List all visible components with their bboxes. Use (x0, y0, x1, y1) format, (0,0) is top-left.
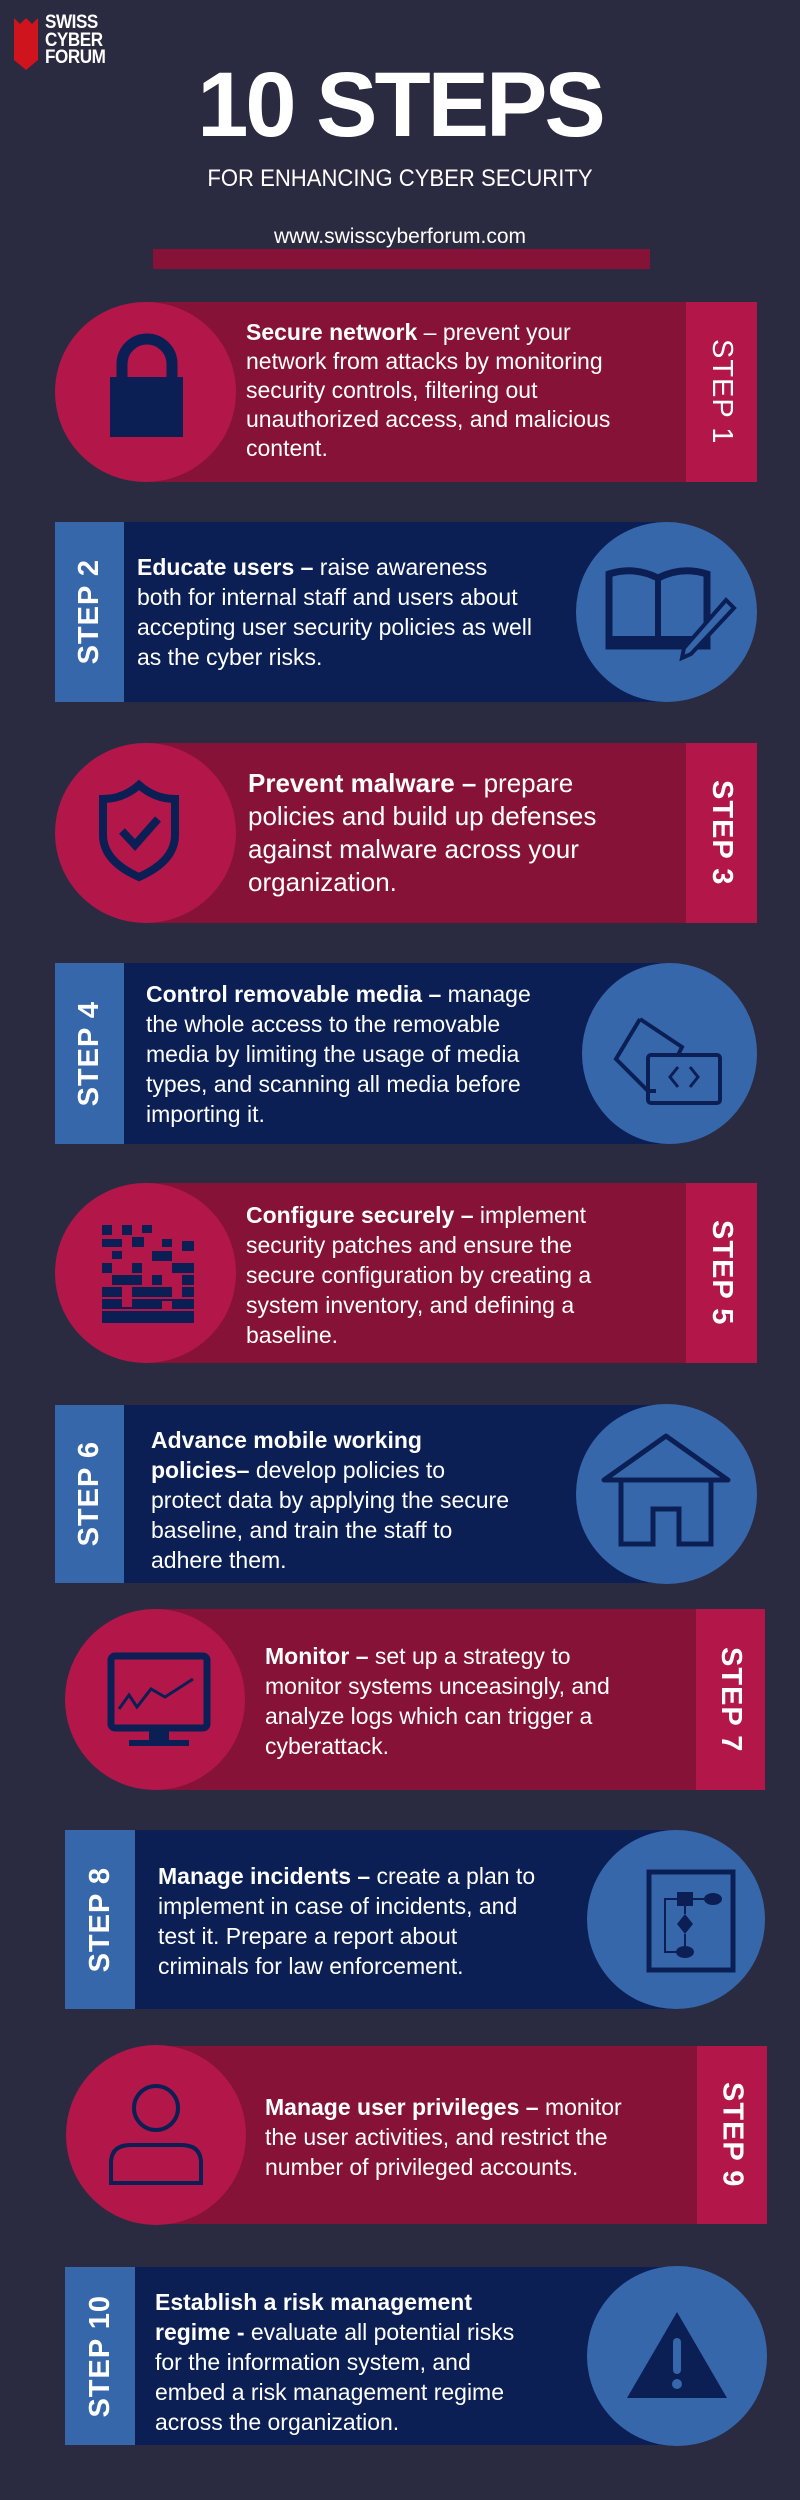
text: secure network: security controls, filtering out (246, 377, 537, 403)
text: establish a risk management regime: for the information system, and (155, 2349, 471, 2375)
icon: shield with check (55, 743, 236, 923)
logo text (45, 12, 105, 68)
icon: removable media cards (582, 963, 757, 1144)
text: manage incidents: Manage incidents – create a plan to (158, 1863, 535, 1889)
text: secure network: network from attacks by monitoring (246, 348, 603, 374)
step 1 tab: STEP 1 (706, 339, 738, 445)
text: advance mobile working policies (151, 1427, 509, 1573)
text: prevent malware (248, 768, 596, 897)
logo (14, 12, 105, 70)
panel: step 1 (55, 302, 757, 482)
text: establish a risk management regime: regime - evaluate all potential risks (155, 2319, 514, 2345)
icon: flowchart (587, 1830, 765, 2009)
text: control removable media: types, and scanning all media before (146, 1071, 521, 1097)
step 8 tab (65, 1830, 135, 2009)
text: manage user privileges: Manage user privileges – monitor (265, 2094, 622, 2120)
step 8 tab: STEP 8 (84, 1867, 116, 1972)
text: configure securely: system inventory, and defining a (246, 1292, 574, 1318)
text: secure network: unauthorized access, and malicious (246, 406, 610, 432)
step 2 tab (55, 522, 124, 702)
text: configure securely: Configure securely – implement (246, 1202, 586, 1228)
logo text: SWISS (45, 12, 98, 33)
text: manage incidents: criminals for law enforcement. (158, 1953, 464, 1979)
panel: step 8 (65, 1830, 765, 2009)
panel: step 3 (55, 743, 757, 923)
step 5 tab: STEP 5 (706, 1220, 738, 1326)
text: control removable media (146, 981, 531, 1127)
text: secure network: Secure network – prevent your (246, 319, 571, 345)
text: educate users: Educate users – raise awareness (137, 554, 487, 580)
text: establish a risk management regime: Establish a risk management (155, 2289, 472, 2315)
text: manage incidents: test it. Prepare a report about (158, 1923, 457, 1949)
red divider bar (153, 249, 650, 269)
text: control removable media: media by limiting the usage of media (146, 1041, 519, 1067)
step 3 tab (686, 743, 757, 923)
step 9 tab: STEP 9 (716, 2082, 748, 2188)
panel: step 6 (55, 1404, 757, 1584)
step 2 tab: STEP 2 (73, 559, 105, 665)
subtitle: FOR ENHANCING CYBER SECURITY (207, 165, 593, 192)
step 4 tab: STEP 4 (73, 1001, 105, 1106)
icon: red shield (14, 18, 38, 70)
text: control removable media: Control removable media – manage (146, 981, 531, 1007)
text: secure network: content. (246, 435, 328, 461)
title: 10 STEPS (197, 54, 603, 156)
text: manage user privileges: number of privileged accounts. (265, 2154, 578, 2180)
step 6 tab: STEP 6 (73, 1441, 105, 1547)
text: prevent malware: against malware across your (248, 834, 579, 864)
step 4 tab (55, 963, 124, 1144)
icon: book and pencil (576, 522, 757, 702)
step 9 tab (697, 2046, 767, 2224)
step 6 tab (55, 1405, 124, 1583)
text: educate users (137, 554, 532, 670)
text: manage incidents: implement in case of incidents, and (158, 1893, 517, 1919)
text: manage user privileges: the user activities, and restrict the (265, 2124, 608, 2150)
icon: monitor with chart (65, 1609, 245, 1790)
text: control removable media: importing it. (146, 1101, 265, 1127)
text: monitor: cyberattack. (265, 1733, 389, 1759)
text: monitor: Monitor – set up a strategy to (265, 1643, 571, 1669)
text: advance mobile working policies: baseline, and train the staff to (151, 1517, 452, 1543)
text: establish a risk management regime (155, 2289, 514, 2435)
text: control removable media: the whole access to the removable (146, 1011, 500, 1037)
step 3 tab: STEP 3 (706, 780, 738, 886)
icon: padlock (55, 302, 236, 482)
step 10 tab: STEP 10 (84, 2295, 116, 2417)
step 5 tab (686, 1183, 757, 1363)
text: configure securely: security patches and ensure the (246, 1232, 572, 1258)
text: monitor: analyze logs which can trigger a (265, 1703, 592, 1729)
text: advance mobile working policies: policies– develop policies to (151, 1457, 445, 1483)
step 1 tab (686, 302, 757, 482)
icon: configuration pixel grid (55, 1183, 236, 1363)
panel: step 9 (66, 2045, 767, 2225)
panel: step 4 (55, 963, 757, 1144)
text: monitor: monitor systems unceasingly, and (265, 1673, 610, 1699)
icon: user (66, 2045, 246, 2225)
logo text: CYBER (45, 30, 103, 50)
icon: warning triangle (587, 2266, 767, 2446)
step 7 tab (696, 1609, 765, 1790)
text: secure network (246, 319, 610, 461)
text: prevent malware: organization. (248, 867, 397, 897)
text: configure securely (246, 1202, 592, 1348)
step 10 tab (65, 2267, 135, 2445)
panel: step 10 (65, 2266, 767, 2446)
text: educate users: as the cyber risks. (137, 644, 322, 670)
text: manage incidents (158, 1863, 535, 1979)
text: configure securely: secure configuration by creating a (246, 1262, 591, 1288)
panel: step 5 (55, 1183, 757, 1363)
text: advance mobile working policies: protect data by applying the secure (151, 1487, 509, 1513)
text: prevent malware: policies and build up defenses (248, 801, 596, 831)
text: manage user privileges (265, 2094, 622, 2180)
text: configure securely: baseline. (246, 1322, 338, 1348)
panel: step 2 (55, 522, 757, 702)
text: establish a risk management regime: across the organization. (155, 2409, 399, 2435)
text: educate users: accepting user security policies as well (137, 614, 532, 640)
text: monitor (265, 1643, 610, 1759)
icon: house (576, 1404, 757, 1584)
step 7 tab: STEP 7 (715, 1647, 747, 1752)
text: advance mobile working policies: adhere them. (151, 1547, 287, 1573)
logo text: FORUM (45, 47, 105, 68)
text: advance mobile working policies: Advance mobile working (151, 1427, 422, 1453)
url: www.swisscyberforum.com (274, 225, 526, 248)
text: educate users: both for internal staff and users about (137, 584, 518, 610)
panel: step 7 (65, 1609, 765, 1790)
text: establish a risk management regime: embed a risk management regime (155, 2379, 504, 2405)
text: prevent malware: Prevent malware – prepare (248, 768, 573, 798)
